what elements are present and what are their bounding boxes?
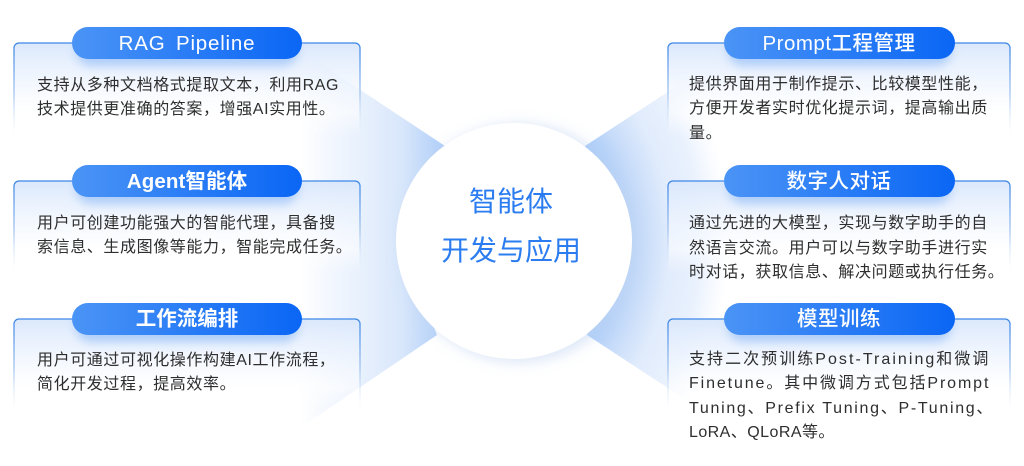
center title — [441, 186, 581, 266]
text block: Agent description — [37, 214, 352, 256]
text block: training description: 支持二次预训练Post-Training和微调 — [689, 350, 989, 368]
text block: Prompt description: 量。 — [689, 125, 722, 142]
text block: digital human description: 然语言交流。用户可以与数字助手进行实 — [689, 239, 988, 257]
center circle — [396, 123, 638, 362]
text block: training description: Finetune。其中微调方式包括Prompt — [689, 374, 989, 392]
text block: training description: Tuning、Prefix Tuning、P-Tuning、 — [689, 400, 993, 417]
text block: workflow description — [37, 351, 336, 393]
heading: Prompt工程管理: Prompt工程管理 — [762, 32, 916, 55]
panel: Agent智能体 — [14, 165, 360, 273]
panel: Prompt工程管理 — [668, 27, 1010, 142]
heading: Agent智能体: Agent智能体 — [127, 170, 248, 193]
panel: RAG Pipeline — [14, 27, 360, 137]
text block: digital human description: 时对话，获取信息、解决问题或执行任务。 — [689, 263, 1004, 281]
center title: 开发与应用 — [441, 235, 581, 266]
right connector beams — [585, 48, 735, 432]
text block: Agent description: 索信息、生成图像等能力，智能完成任务。 — [37, 238, 352, 256]
center title: 智能体 — [469, 186, 553, 217]
panel: 模型训练 — [668, 303, 1010, 441]
text block: RAG Pipeline description: 技术提供更准确的答案，增强AI实用性。 — [37, 100, 336, 118]
text block: Prompt description: 提供界面用于制作提示、比较模型性能， — [689, 75, 988, 93]
panel: 工作流编排 — [14, 303, 360, 411]
text block: digital human description: 通过先进的大模型，实现与数字助手的自 — [689, 214, 988, 232]
heading: 工作流编排: 工作流编排 — [136, 306, 238, 330]
text block: training description — [689, 350, 993, 441]
text block: Agent description: 用户可创建功能强大的智能代理，具备搜 — [37, 214, 336, 232]
text block: workflow description: 用户可通过可视化操作构建AI工作流程， — [37, 351, 336, 369]
text block: RAG Pipeline description — [37, 76, 339, 118]
text block: Prompt description — [689, 75, 988, 142]
left connector beams — [300, 50, 445, 428]
heading: 数字人对话: 数字人对话 — [786, 170, 892, 193]
text block: Prompt description: 方便开发者实时优化提示词，提高输出质 — [689, 99, 988, 117]
text block: workflow description: 简化开发过程，提高效率。 — [37, 375, 236, 393]
heading: RAG Pipeline: RAG Pipeline — [119, 32, 255, 55]
text block: training description: LoRA、QLoRA等。 — [689, 423, 835, 441]
text block: digital human description — [689, 214, 1004, 281]
text block: RAG Pipeline description: 支持从多种文档格式提取文本，利用RAG — [37, 76, 339, 94]
heading: 模型训练: 模型训练 — [797, 308, 881, 330]
panel: 数字人对话 — [668, 165, 1010, 281]
